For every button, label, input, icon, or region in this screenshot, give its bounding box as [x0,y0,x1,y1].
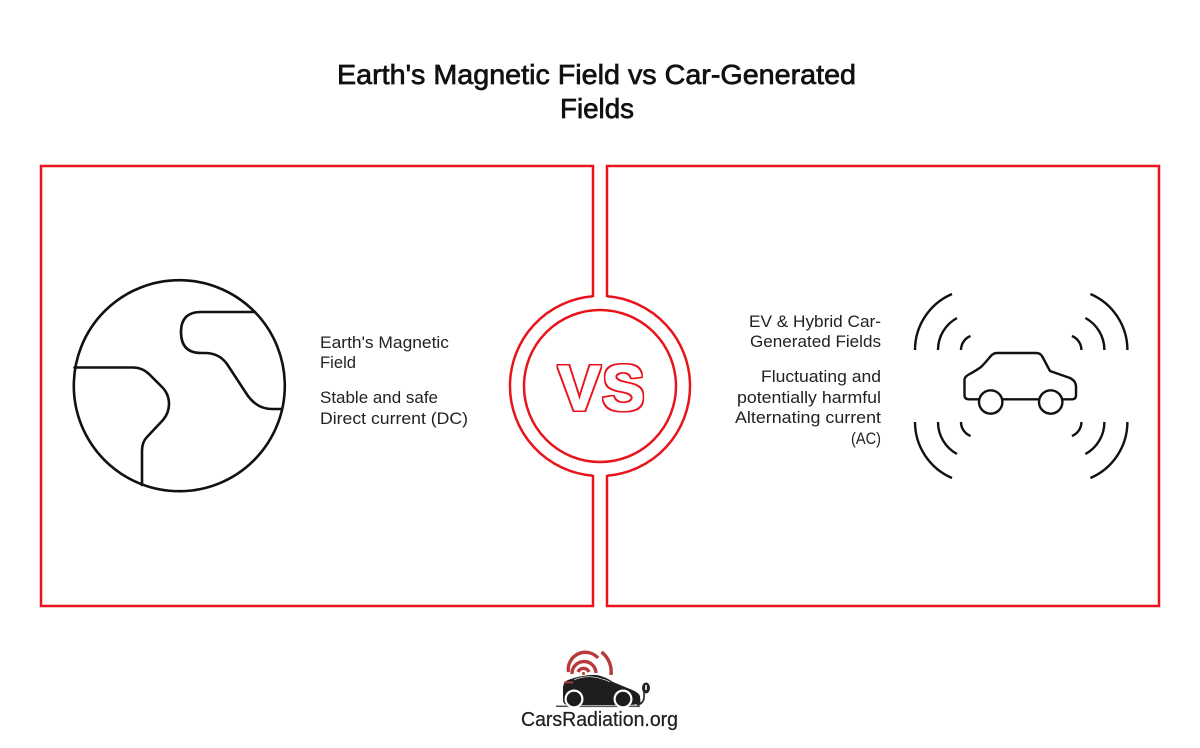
logo wordmark: CarsRadiation.org [521,708,678,731]
text: car-generated fields description: Fluctuating and [761,368,881,386]
icon: globe [74,280,285,491]
icon: logo car silhouette [556,675,650,708]
VS badge: VS [558,352,645,424]
logo: CarsRadiation.org [521,652,678,731]
panel: car-generated fields [607,166,1159,606]
title: Earth's Magnetic Field vs Car-Generated [337,59,856,90]
text: car-generated fields description: Alternating current [735,409,881,427]
text: Earth's magnetic field description: Earth's Magnetic [320,334,449,352]
text: car-generated fields description: EV & Hybrid Car- [749,313,881,331]
icon: logo signal arcs [568,652,611,675]
VS badge [510,296,690,476]
text: car-generated fields description [735,313,881,448]
icon: car with radiating waves [915,294,1127,478]
text: car-generated fields description: potentially harmful [737,389,881,407]
title [337,59,856,124]
panel: Earth's magnetic field [41,166,593,606]
text: Earth's magnetic field description: Direct current (DC) [320,410,468,428]
text: Earth's magnetic field description [320,334,468,428]
text: car-generated fields description: (AC) [851,430,881,448]
text: Earth's magnetic field description: Stable and safe [320,389,438,407]
title: Fields [560,93,634,124]
text: car-generated fields description: Generated Fields [750,333,881,351]
text: Earth's magnetic field description: Field [320,354,356,372]
